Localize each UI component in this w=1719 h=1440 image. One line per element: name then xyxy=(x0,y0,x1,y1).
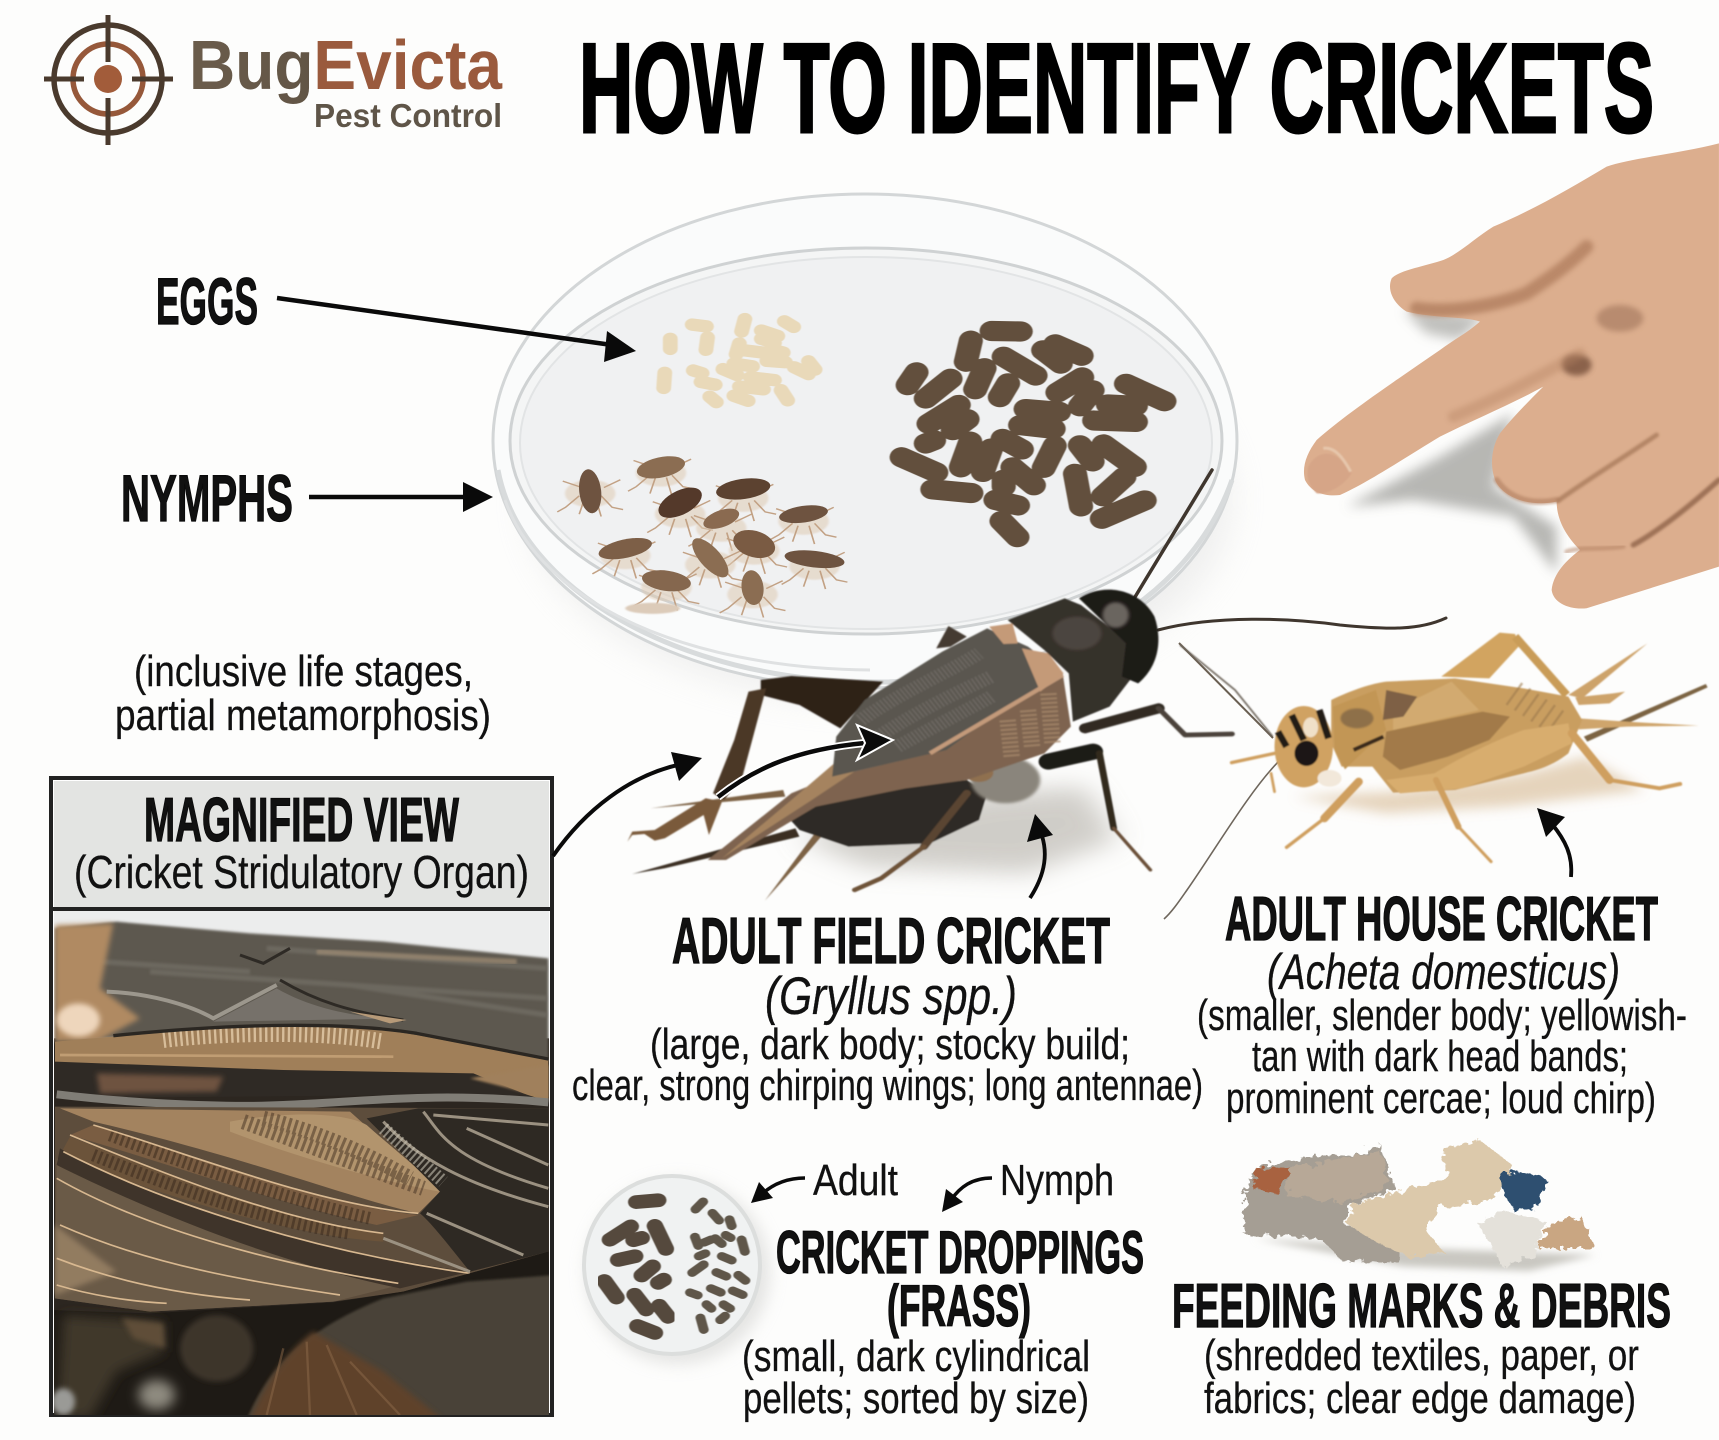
adult droppings xyxy=(604,1200,668,1333)
arrow: house cricket label xyxy=(1537,808,1571,877)
shredded debris xyxy=(1244,1140,1595,1271)
pointing hand xyxy=(1304,143,1719,609)
dish shadow xyxy=(530,300,1230,700)
middle leg xyxy=(1048,752,1093,762)
thumb shadow xyxy=(1403,310,1487,340)
arrow: eggs xyxy=(277,298,636,362)
right wing dark xyxy=(367,1108,548,1272)
feeding marks description xyxy=(1172,1272,1671,1423)
hand shadow xyxy=(1347,413,1557,573)
heading: CRICKET DROPPINGS xyxy=(776,1219,1144,1286)
torn textile xyxy=(1244,1145,1403,1262)
droppings description: pellets; sorted by size) xyxy=(743,1374,1089,1423)
arrow: adult xyxy=(751,1178,805,1203)
subheading: (Cricket Stridulatory Organ) xyxy=(74,846,529,898)
cricket shadow xyxy=(795,787,1118,873)
dorsal wing xyxy=(832,628,1063,777)
palm and fingers xyxy=(1304,143,1719,609)
arrow: to stridulatory organ xyxy=(718,725,893,797)
hind femur xyxy=(761,676,883,728)
adult house cricket description xyxy=(1197,885,1687,1123)
nymph droppings label: Nymph xyxy=(1000,1156,1114,1205)
rust patch xyxy=(1252,1168,1291,1193)
panel frame xyxy=(51,778,552,1415)
brand tagline: Pest Control xyxy=(314,97,502,134)
species name: (Gryllus spp.) xyxy=(765,967,1017,1026)
debris shadow xyxy=(1255,1239,1595,1271)
droppings description: (FRASS) xyxy=(887,1274,1031,1339)
arrow: field cricket label xyxy=(1027,814,1053,898)
fingernail xyxy=(1307,454,1352,494)
upper antenna xyxy=(1180,645,1273,737)
dark band xyxy=(55,1062,527,1095)
arrow: nymphs xyxy=(309,482,493,512)
species name: (Acheta domesticus) xyxy=(1267,944,1620,1000)
rear lower leg xyxy=(855,793,967,890)
wing xyxy=(1383,712,1510,770)
body xyxy=(1331,678,1582,793)
knuckle shadow xyxy=(1597,305,1643,332)
hind tibia xyxy=(713,688,766,800)
pronotum xyxy=(1333,690,1386,769)
adult field cricket description xyxy=(572,904,1203,1110)
arrow: magnified view to cricket wing xyxy=(553,752,702,856)
life stages note: partial metamorphosis) xyxy=(115,691,491,740)
nymph droppings label xyxy=(942,1156,1114,1212)
heading: MAGNIFIED VIEW xyxy=(144,786,459,855)
cerci xyxy=(1568,643,1647,698)
nymphs xyxy=(557,452,847,617)
nymph droppings xyxy=(690,1202,745,1330)
thin antenna xyxy=(1164,760,1280,919)
eggs label: EGGS xyxy=(156,264,258,338)
droppings pile xyxy=(902,331,1164,537)
droppings dish xyxy=(584,1176,770,1364)
pale underside xyxy=(971,757,1040,803)
blue patch xyxy=(1499,1170,1546,1211)
life stages note: (inclusive life stages, xyxy=(134,647,473,696)
silver ridge xyxy=(57,1094,548,1106)
adult field cricket xyxy=(627,470,1446,901)
wing ribs xyxy=(57,1125,470,1303)
brown fan xyxy=(70,1125,418,1225)
stub leg xyxy=(936,626,967,648)
lateral wing xyxy=(708,673,1071,860)
lower body xyxy=(50,1252,555,1420)
wing close-up image xyxy=(50,905,555,1420)
abdomen xyxy=(787,780,987,847)
adult field cricket description: clear, strong chirping wings; long antennae) xyxy=(572,1061,1203,1110)
arrow: nymph xyxy=(942,1178,992,1212)
droppings description xyxy=(742,1219,1144,1423)
lower wing base xyxy=(55,1107,548,1312)
dish glass xyxy=(584,1176,760,1354)
band with file teeth xyxy=(55,1025,548,1102)
front leg xyxy=(1048,708,1232,870)
logo xyxy=(44,15,503,145)
traits: (large, dark body; stocky build; xyxy=(650,1020,1130,1069)
head xyxy=(1275,706,1333,787)
heading: ADULT FIELD CRICKET xyxy=(672,904,1110,977)
legs xyxy=(1232,733,1680,862)
adult house cricket xyxy=(1164,633,1708,919)
upper wing xyxy=(55,922,548,1062)
dish shadow xyxy=(586,1180,770,1364)
head xyxy=(1079,590,1158,683)
brand name: BugEvicta xyxy=(189,26,503,104)
header divider xyxy=(52,907,551,911)
eggs xyxy=(664,319,815,402)
adult droppings label: Adult xyxy=(813,1156,898,1205)
paper scrap xyxy=(1348,1140,1513,1257)
white scrap xyxy=(1480,1211,1546,1266)
traits: (small, dark cylindrical xyxy=(742,1332,1090,1381)
panel: magnified view xyxy=(50,778,555,1420)
cerci and rear tarsus xyxy=(651,790,785,808)
hind femur lower xyxy=(1386,723,1572,793)
tan scrap xyxy=(1537,1216,1595,1248)
tan wing patches xyxy=(989,623,1063,692)
antennae xyxy=(1135,470,1446,630)
life stages note xyxy=(115,647,491,740)
outer wing panels xyxy=(55,1158,400,1312)
tan fan xyxy=(60,1108,440,1213)
image underlay xyxy=(54,1038,549,1314)
cricket shadow xyxy=(1293,757,1644,813)
panel header xyxy=(54,781,549,907)
blurred lower body right xyxy=(247,1275,555,1420)
thin antenna xyxy=(1179,643,1273,738)
nymphs label: NYMPHS xyxy=(121,461,293,535)
adult droppings label xyxy=(751,1156,898,1205)
hind femur upper xyxy=(1441,633,1519,678)
finger shading xyxy=(1417,247,1719,552)
petri dish with life stages xyxy=(493,194,1237,700)
dish glass xyxy=(493,194,1237,688)
icon: crosshair target xyxy=(44,15,173,145)
pronotum xyxy=(1008,598,1130,722)
